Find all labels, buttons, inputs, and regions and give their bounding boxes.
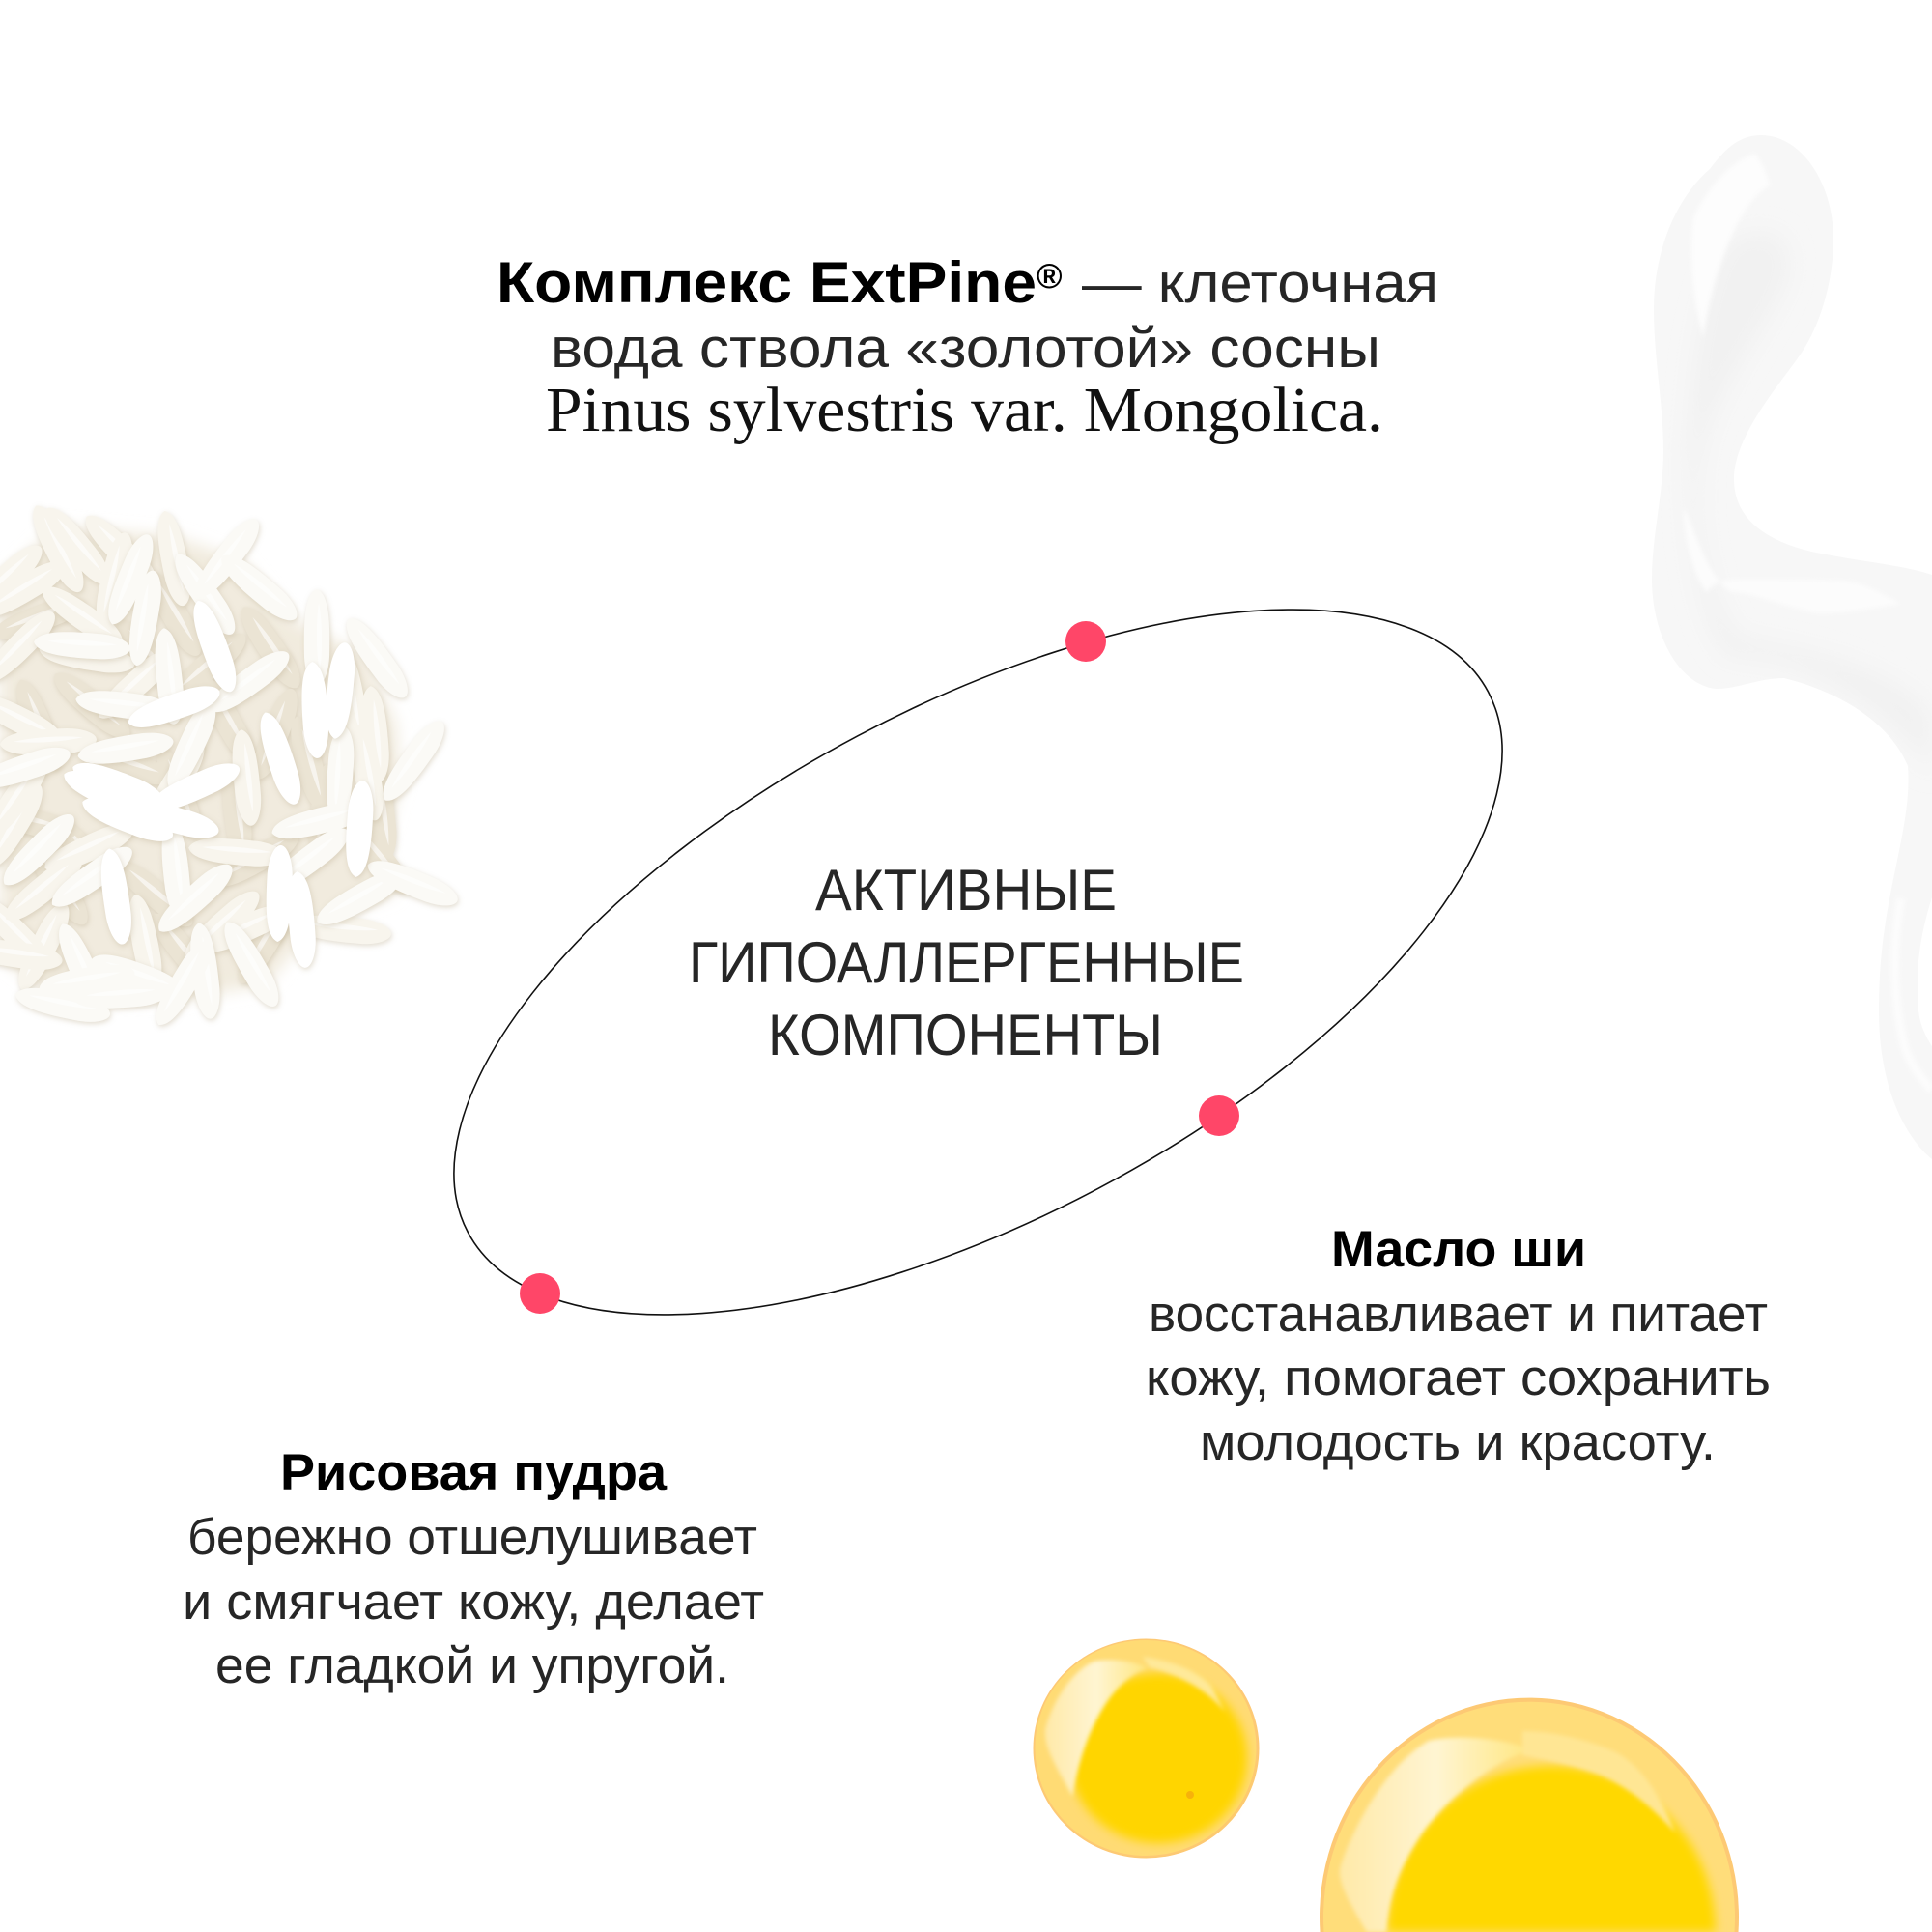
text block: shea butter: молодость и красоту. bbox=[1200, 1414, 1716, 1471]
center label: АКТИВНЫЕ bbox=[815, 858, 1117, 923]
image: large oil drop bbox=[1320, 1698, 1739, 1932]
dot: bottom left bbox=[520, 1273, 560, 1314]
dot: top bbox=[1065, 621, 1106, 662]
image: white cream smear bbox=[1660, 162, 1932, 1097]
image: rice pile bbox=[0, 499, 462, 1032]
title text: Комплекс ExtPine bbox=[497, 250, 1037, 315]
text block: rice powder: бережно отшелушивает bbox=[187, 1509, 757, 1566]
center label bbox=[689, 858, 1244, 1067]
text block: shea butter: Масло ши bbox=[1331, 1221, 1586, 1278]
title text: Pinus sylvestris var. Mongolica. bbox=[546, 375, 1383, 445]
text block: shea butter: восстанавливает и питает bbox=[1149, 1286, 1768, 1343]
title text bbox=[497, 250, 1438, 445]
text block: shea butter: кожу, помогает сохранить bbox=[1146, 1350, 1771, 1406]
center label: КОМПОНЕНТЫ bbox=[768, 1003, 1163, 1067]
center label: ГИПОАЛЛЕРГЕННЫЕ bbox=[689, 930, 1244, 995]
text block: rice powder bbox=[183, 1444, 764, 1694]
text block: rice powder: и смягчает кожу, делает bbox=[183, 1574, 764, 1631]
title text: вода ствола «золотой» сосны bbox=[551, 317, 1380, 380]
image: small oil drop bbox=[1034, 1638, 1260, 1859]
text block: rice powder: ее гладкой и упругой. bbox=[215, 1637, 729, 1694]
title text: ® bbox=[1037, 256, 1063, 296]
text block: rice powder: Рисовая пудра bbox=[280, 1444, 668, 1501]
text block: shea butter bbox=[1146, 1221, 1771, 1471]
title text: — клеточная bbox=[1082, 252, 1438, 315]
dot: right bbox=[1199, 1095, 1239, 1136]
tilted ellipse orbit with dots bbox=[348, 466, 1608, 1459]
